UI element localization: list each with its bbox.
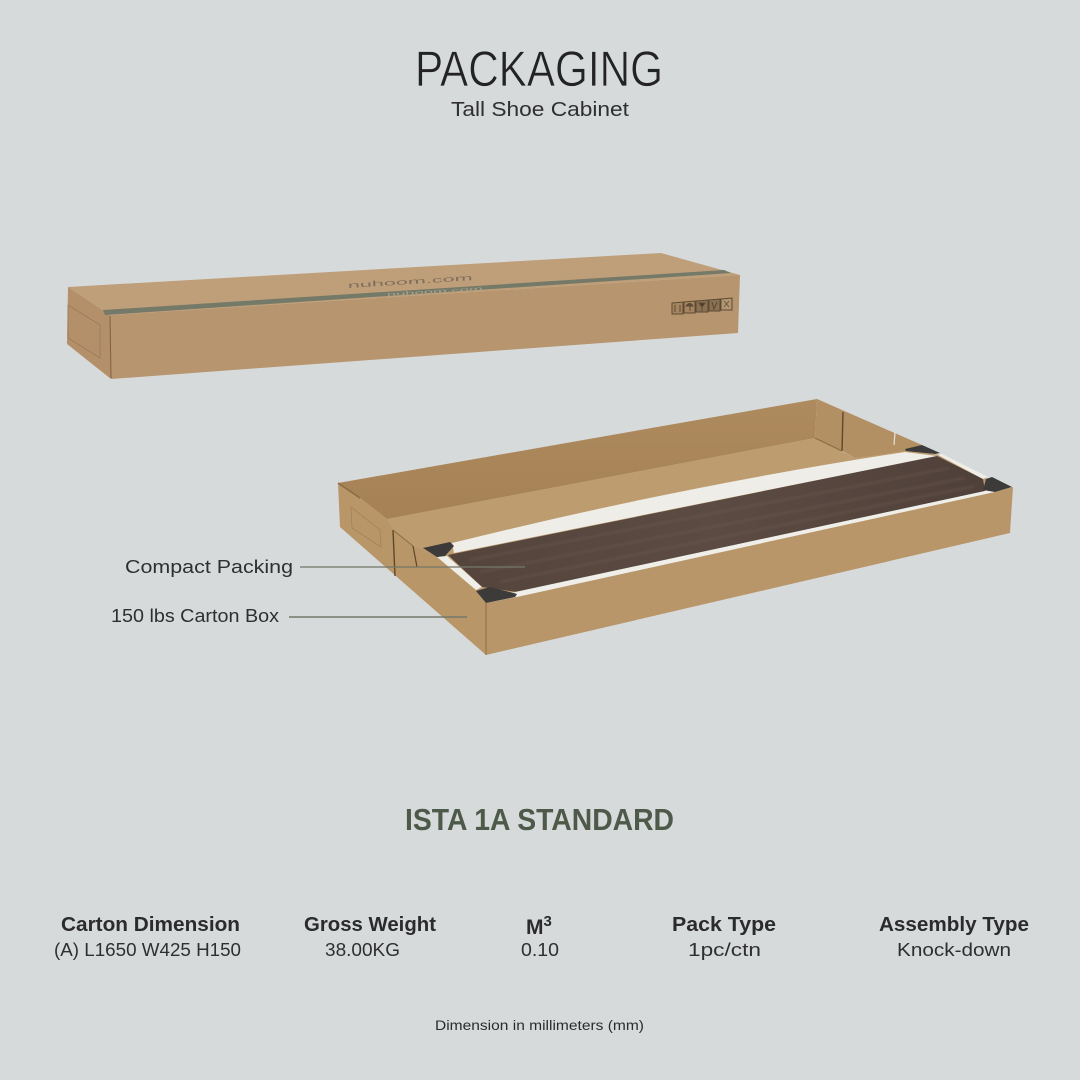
closed carton box [67, 253, 740, 379]
subtitle: Tall Shoe Cabinet [451, 99, 629, 121]
spec: assembly type: Assembly Type [879, 914, 1029, 936]
spec: cubic metres: 3 [544, 913, 552, 930]
spec: gross weight: Gross Weight [304, 914, 436, 936]
spec: pack type [672, 914, 776, 960]
tape stripe [103, 270, 731, 315]
spec: pack type: 1pc/ctn [688, 940, 761, 960]
footnote: Dimension in millimeters (mm) [435, 1018, 644, 1033]
spec: pack type: Pack Type [672, 914, 776, 936]
callout: carton box: 150 lbs Carton Box [111, 606, 279, 626]
spec: cubic metres [521, 913, 559, 960]
front wall [486, 487, 1013, 655]
spec: assembly type: Knock-down [897, 940, 1011, 960]
floor [380, 438, 1000, 595]
label panel on end [68, 305, 100, 358]
white foam panel [452, 452, 937, 553]
handling icons [672, 298, 732, 314]
black corner protectors [423, 445, 1012, 603]
brand text on tape: nuhoom.com [387, 286, 483, 298]
callout: compact packing: Compact Packing [125, 557, 293, 577]
spec: cubic metres: 0.10 [521, 940, 559, 960]
left wall [338, 483, 486, 655]
spec: gross weight: 38.00KG [325, 940, 400, 960]
spec: cubic metres: M [526, 916, 544, 939]
open carton box with panel [338, 399, 1013, 655]
walnut panel [448, 456, 985, 592]
spec: carton dimension: Carton Dimension [61, 914, 240, 936]
spec: assembly type [879, 914, 1029, 960]
spec: gross weight [304, 914, 436, 960]
brand text on top: nuhoom.com [348, 273, 474, 290]
white foam strips [515, 490, 995, 597]
back wall [338, 399, 817, 519]
heading: standard: ISTA 1A STANDARD [405, 802, 674, 837]
right wall inner [815, 399, 922, 458]
title: PACKAGING [415, 41, 663, 97]
spec: carton dimension: (A) L1650 W425 H150 [54, 940, 241, 960]
spec: carton dimension [54, 914, 241, 960]
